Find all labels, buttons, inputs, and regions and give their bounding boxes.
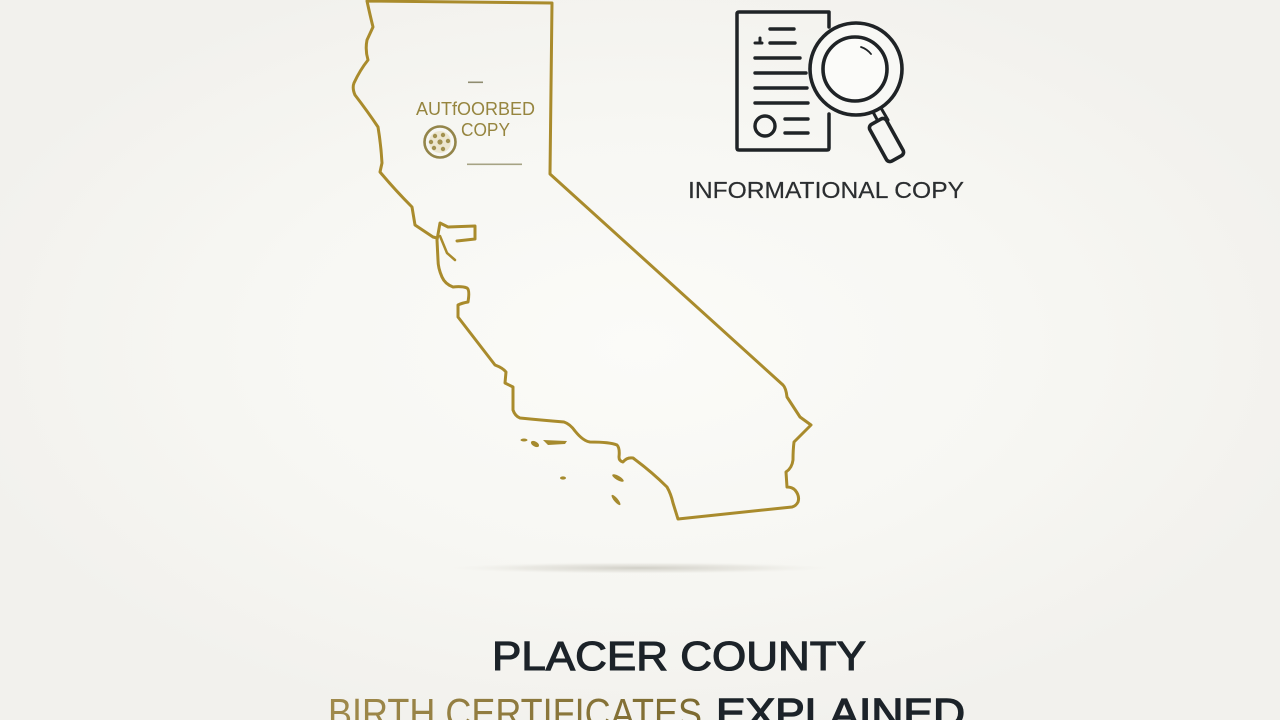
bay delta <box>440 236 455 260</box>
stamp label line 1: AUTfOORBED <box>416 99 535 119</box>
stamp top rule <box>468 82 483 83</box>
magnifying glass <box>810 23 905 163</box>
channel islands <box>520 438 625 506</box>
stamp bottom rule <box>467 164 522 165</box>
map shadow <box>445 562 835 574</box>
island: Santa Catalina <box>611 473 625 483</box>
title <box>328 633 965 720</box>
state border <box>353 1 811 519</box>
title line 1: PLACER COUNTY <box>492 633 866 679</box>
island: Santa Cruz <box>543 440 567 445</box>
authorized copy stamp <box>416 82 535 165</box>
lens glint <box>861 47 871 54</box>
island: San Clemente <box>610 494 622 506</box>
handle neck <box>873 108 888 125</box>
handle <box>868 117 905 163</box>
document mark <box>755 38 762 43</box>
informational copy icon <box>737 12 905 163</box>
stamp seal <box>424 126 456 158</box>
California state map outline <box>353 1 811 519</box>
island: Santa Barbara <box>560 476 566 480</box>
informational copy label: INFORMATIONAL COPY <box>688 177 964 203</box>
island: San Miguel <box>520 438 528 442</box>
stamp label line 2: COPY <box>461 120 510 140</box>
document <box>737 12 829 150</box>
document seal <box>755 116 775 136</box>
island: Santa Rosa <box>530 440 540 448</box>
document text lines <box>755 29 808 133</box>
